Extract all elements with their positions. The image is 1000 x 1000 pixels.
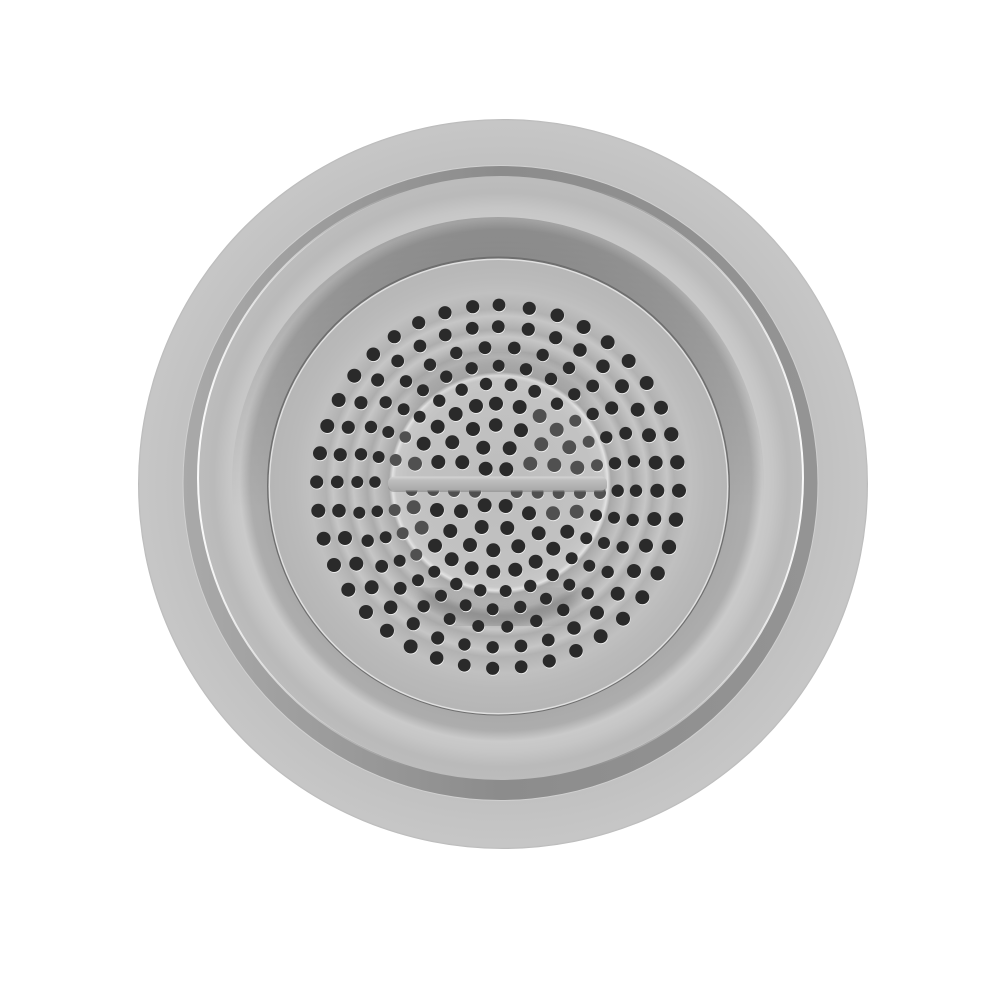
center handle bar [388, 476, 607, 492]
perforated strainer disc [270, 260, 727, 713]
strainer rim [267, 256, 730, 716]
perforation holes [310, 299, 686, 676]
recessed groove ring [182, 165, 818, 801]
outer flange [138, 119, 868, 849]
shadow bands on strainer [415, 362, 585, 619]
basin bowl [198, 176, 803, 780]
